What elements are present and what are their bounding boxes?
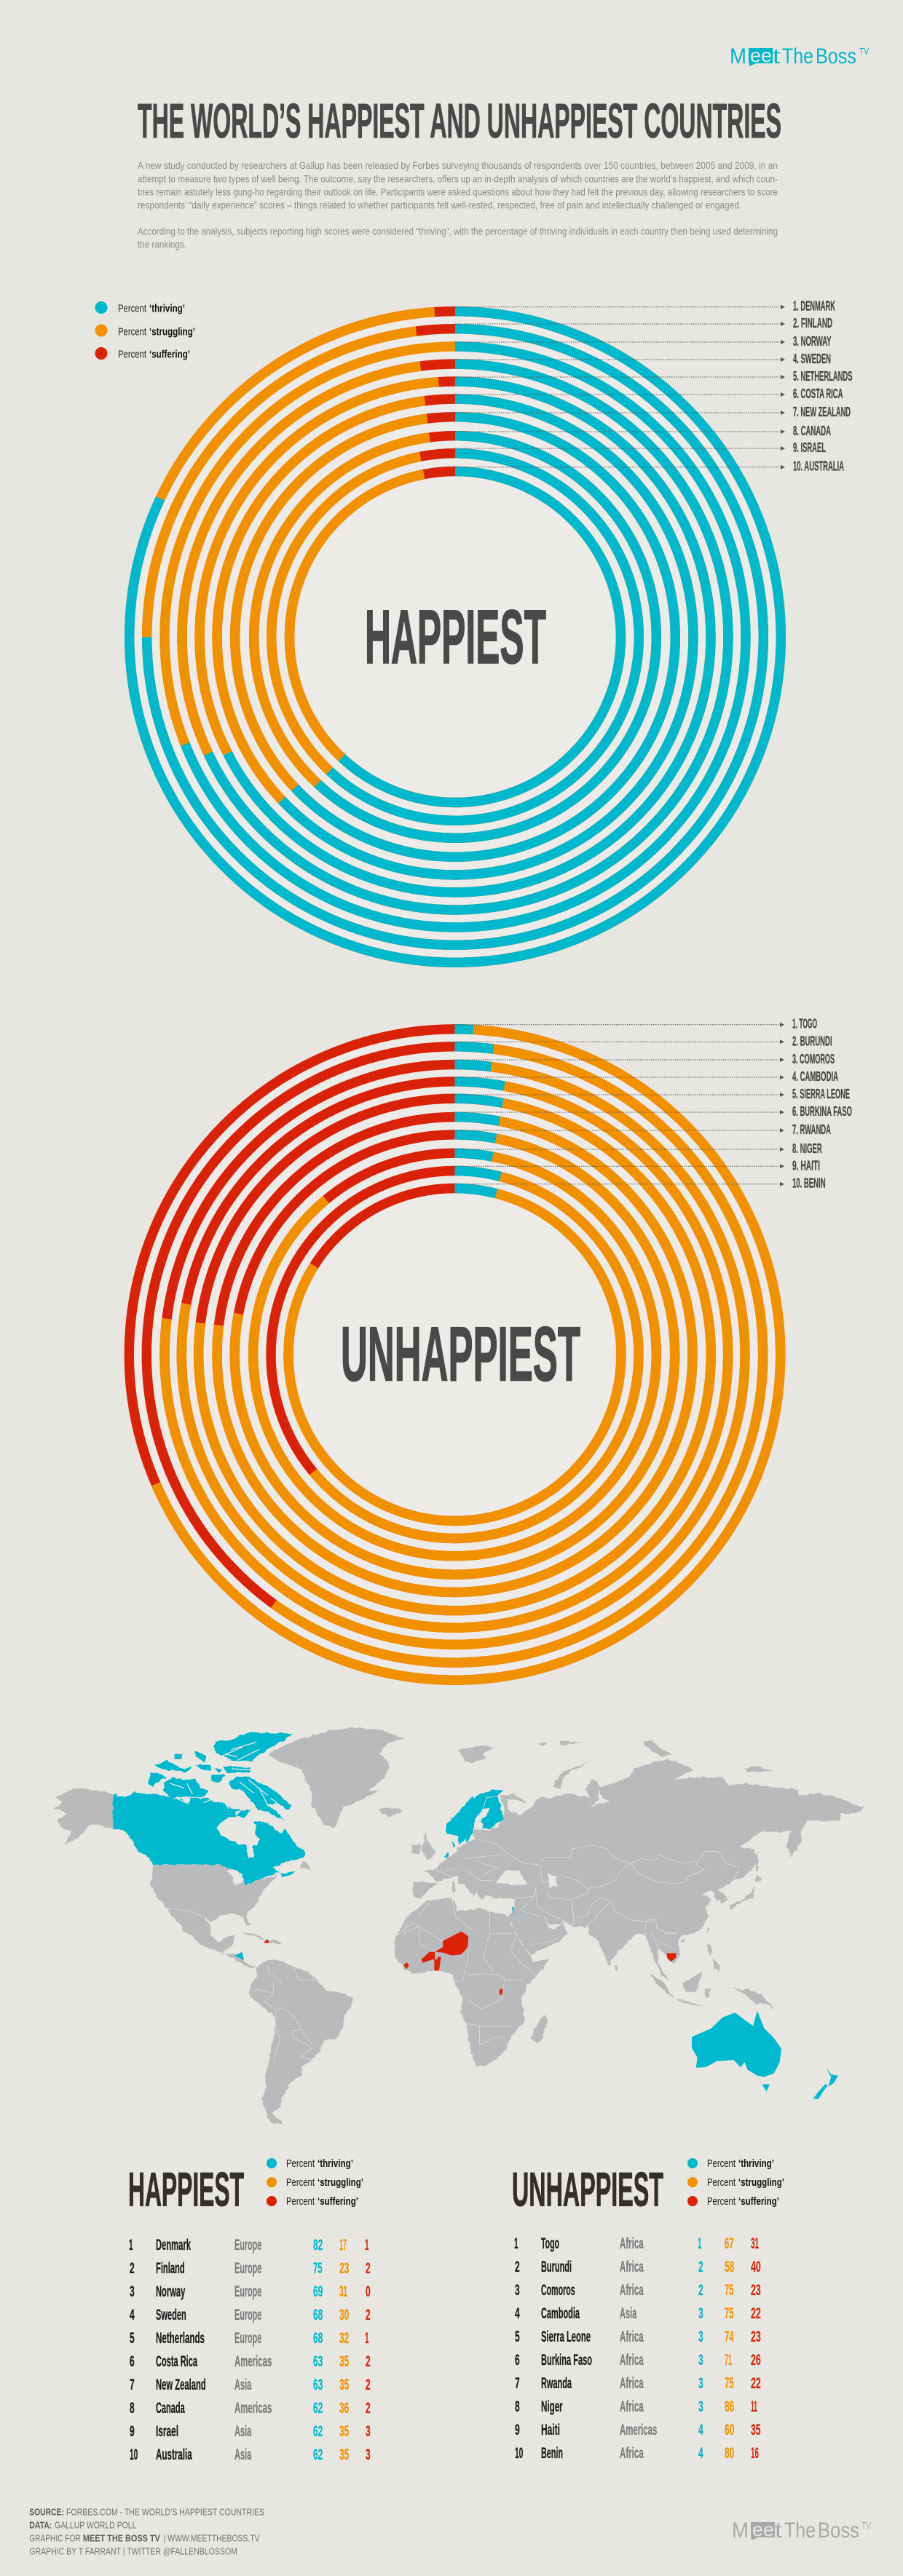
row: Canada: Canada: [156, 2400, 185, 2417]
row: Norway: 69: [313, 2283, 323, 2300]
row: Niger: 86: [725, 2398, 734, 2415]
row: Costa Rica: 35: [339, 2353, 349, 2370]
leader labels: unhappiest: 8. NIGER: [792, 1141, 822, 1156]
row: Sweden: 30: [339, 2307, 349, 2323]
footer credits: SOURCE:: [29, 2507, 64, 2517]
row: Cambodia: 4: [515, 2305, 520, 2322]
logo: Meet The Boss TV (top): Boss: [816, 44, 856, 68]
row: Finland: [130, 2260, 371, 2277]
row: Sierra Leone: [515, 2329, 761, 2345]
row: Burundi: 2: [515, 2259, 520, 2275]
row: Niger: [515, 2398, 757, 2415]
map: Canadian Arctic channels: [170, 1742, 285, 1809]
row: Israel: 35: [339, 2423, 349, 2440]
row: Burkina Faso: Africa: [620, 2352, 644, 2369]
row: Rwanda: Africa: [620, 2375, 644, 2392]
map: inland seas: [497, 1789, 611, 1929]
row: Finland: Finland: [156, 2260, 185, 2277]
ring: Comoros: [165, 1064, 745, 1645]
row: Denmark: 1: [129, 2237, 133, 2254]
ring: Finland: [147, 329, 763, 945]
row: Haiti: 9: [515, 2422, 520, 2438]
row: Costa Rica: 2: [366, 2353, 371, 2370]
ring: Canada: [254, 436, 656, 838]
row: Togo: 67: [725, 2235, 734, 2252]
legend: top: ‘suffering’: [149, 349, 190, 361]
row: Australia: 62: [313, 2446, 323, 2463]
logo: Meet The Boss TV (top): M: [730, 44, 746, 68]
map: borders Americas and Africa: [167, 1856, 535, 2062]
row: Rwanda: 3: [698, 2375, 703, 2392]
row: Burkina Faso: Burkina Faso: [541, 2352, 592, 2369]
legend: top: Percent: [118, 325, 147, 338]
logo: Meet The Boss TV (top): t: [773, 44, 781, 68]
legend: unhappiest table: ‘thriving’: [738, 2157, 774, 2170]
row: Benin: [515, 2445, 759, 2462]
row: Comoros: 2: [698, 2282, 703, 2299]
row: Denmark: Denmark: [156, 2237, 191, 2254]
row: Israel: [130, 2423, 371, 2440]
chart: unhappiest rings: UNHAPPIEST: [341, 1311, 580, 1397]
row: Comoros: Africa: [620, 2282, 644, 2299]
table: happiest: 1: [365, 2237, 369, 2254]
row: Niger: 8: [515, 2398, 520, 2415]
intro text: the rankings.: [138, 238, 186, 250]
row: Comoros: 75: [725, 2282, 734, 2299]
world map: [53, 1727, 864, 2124]
leader labels: happiest: 8. CANADA: [793, 423, 831, 438]
footer credits: DATA:: [29, 2520, 52, 2530]
row: Finland: 2: [130, 2260, 135, 2277]
table: unhappiest: 16: [751, 2445, 759, 2462]
row: Burkina Faso: 3: [698, 2352, 703, 2369]
table: unhappiest: [512, 2157, 784, 2462]
intro text: tries remain astutely less gung-ho regarding their outlook on life. Participants were asked questions about how they had felt the previous day, allowing researchers to score: [138, 186, 778, 197]
row: Netherlands: 32: [339, 2330, 349, 2347]
row: Australia: 3: [366, 2446, 371, 2463]
row: New Zealand: [130, 2377, 371, 2393]
row: Netherlands: Europe: [234, 2330, 261, 2347]
row: Togo: 1: [514, 2235, 518, 2252]
row: Rwanda: [515, 2375, 761, 2392]
row: Australia: Australia: [156, 2446, 192, 2463]
row: Cambodia: 3: [698, 2305, 703, 2322]
logo: Meet The Boss TV (bottom): Boss: [818, 2518, 859, 2543]
logo: Meet The Boss TV (bottom): t: [775, 2518, 783, 2543]
row: Australia: [130, 2446, 371, 2463]
row: Sweden: 4: [130, 2307, 135, 2323]
ring: Togo: [129, 1029, 781, 1680]
row: Costa Rica: [130, 2353, 371, 2370]
legend: top: Percent: [118, 349, 147, 361]
row: Togo: Togo: [541, 2235, 559, 2252]
row: Denmark: Europe: [234, 2237, 261, 2254]
row: Cambodia: 75: [725, 2305, 734, 2322]
leader labels: unhappiest: 1. TOGO: [792, 1016, 817, 1031]
map: Eurasia, Australia and islands: [458, 1741, 864, 2099]
footer credits: GALLUP WORLD POLL: [55, 2520, 136, 2530]
row: New Zealand: 63: [313, 2377, 323, 2393]
legend: happiest table: Percent: [286, 2195, 315, 2208]
logo: Meet The Boss TV (bottom): The: [784, 2518, 816, 2543]
intro text: According to the analysis, subjects reporting high scores were considered “thriving”, with the percentage of thriving individuals in each country then being used determining: [138, 225, 778, 237]
legend: top: Percent: [118, 303, 147, 314]
row: Israel: 9: [130, 2423, 135, 2440]
legend: happiest table: ‘struggling’: [318, 2176, 363, 2189]
row: Sweden: Sweden: [156, 2307, 186, 2323]
map: Nordic happiest countries: [466, 1789, 504, 1842]
ring: Sierra Leone: [199, 1098, 711, 1611]
row: Norway: 3: [130, 2283, 135, 2300]
row: Rwanda: 75: [725, 2375, 734, 2392]
table: happiest: [128, 2157, 371, 2463]
table: unhappiest: 31: [751, 2235, 759, 2252]
ring: Haiti: [271, 1170, 639, 1539]
row: Norway: Europe: [234, 2283, 261, 2300]
row: Sweden: 68: [313, 2307, 323, 2323]
footer credits: | WWW.MEETTHEBOSS.TV: [164, 2533, 260, 2543]
row: Haiti: [515, 2422, 761, 2438]
row: Norway: 31: [339, 2283, 347, 2300]
logo: Meet The Boss TV (top): [730, 44, 869, 68]
legend: happiest table: ‘thriving’: [318, 2157, 353, 2170]
row: Burundi: Burundi: [541, 2259, 572, 2275]
row: Netherlands: 5: [130, 2330, 135, 2347]
leader labels: happiest: 2. FINLAND: [793, 315, 832, 330]
ring: Niger: [253, 1153, 656, 1556]
row: Denmark: 82: [313, 2237, 323, 2254]
row: Rwanda: 22: [751, 2375, 761, 2392]
logo: Meet The Boss TV (top): TV: [859, 46, 869, 57]
row: Denmark: 17: [339, 2237, 347, 2254]
ring: Norway: [165, 346, 746, 927]
row: Norway: Norway: [156, 2283, 185, 2300]
row: Burkina Faso: 6: [515, 2352, 520, 2369]
row: Cambodia: Cambodia: [541, 2305, 580, 2322]
footer credits: MEET THE BOSS TV: [83, 2533, 160, 2543]
row: Costa Rica: Costa Rica: [156, 2353, 197, 2370]
row: Haiti: 60: [725, 2422, 734, 2438]
row: Benin: 4: [698, 2445, 703, 2462]
footer credits: FORBES.COM - THE WORLD’S HAPPIEST COUNTRIES: [66, 2507, 264, 2517]
row: Sierra Leone: Sierra Leone: [541, 2329, 591, 2345]
row: Niger: 3: [698, 2398, 703, 2415]
row: Canada: 2: [366, 2400, 371, 2417]
row: Cambodia: 22: [751, 2305, 761, 2322]
row: Netherlands: 68: [313, 2330, 323, 2347]
ring: Benin: [288, 1188, 621, 1521]
logo: Meet The Boss TV (top): ee: [750, 44, 772, 66]
legend: happiest table: ‘suffering’: [318, 2195, 358, 2208]
chart: unhappiest rings: [124, 1024, 785, 1685]
row: Norway: 0: [366, 2283, 371, 2300]
row: New Zealand: 2: [366, 2377, 371, 2393]
legend: happiest table: Percent: [286, 2157, 315, 2170]
ring: Cambodia: [181, 1082, 728, 1628]
row: Canada: [130, 2400, 371, 2417]
row: Costa Rica: Americas: [234, 2353, 272, 2370]
row: Costa Rica: 63: [313, 2353, 323, 2370]
leader labels: happiest: 9. ISRAEL: [793, 440, 826, 455]
row: Togo: Africa: [620, 2235, 644, 2252]
legend: unhappiest table: ‘suffering’: [738, 2195, 779, 2208]
row: Burundi: Africa: [620, 2259, 644, 2275]
row: Netherlands: Netherlands: [156, 2330, 205, 2347]
footer credits: [29, 2507, 264, 2556]
ring: Costa Rica: [217, 399, 693, 875]
leader labels: happiest: 3. NORWAY: [793, 333, 832, 349]
legend: happiest table: [267, 2157, 363, 2208]
ring: Israel: [272, 453, 639, 820]
intro text: attempt to measure two types of well being. The outcome, say the researchers, offers up an in-depth analysis of which countries are the world’s happiest, and which coun-: [138, 173, 778, 184]
row: Benin: Benin: [541, 2445, 563, 2462]
row: Finland: 75: [313, 2260, 323, 2277]
legend: happiest table: Percent: [286, 2176, 315, 2189]
legend: unhappiest table: Percent: [707, 2157, 736, 2170]
row: Finland: 2: [366, 2260, 371, 2277]
chart: happiest rings: [125, 306, 786, 967]
row: Togo: [514, 2235, 759, 2252]
leader labels: happiest: 10. AUSTRALIA: [793, 459, 844, 474]
logo: Meet The Boss TV (bottom): M: [732, 2518, 749, 2543]
row: Israel: 62: [313, 2423, 323, 2440]
row: Haiti: Haiti: [541, 2422, 560, 2438]
row: Australia: Asia: [234, 2446, 251, 2463]
row: Sierra Leone: Africa: [620, 2329, 644, 2345]
row: Cambodia: Asia: [620, 2305, 636, 2322]
row: Canada: Americas: [234, 2400, 272, 2417]
footer credits: GRAPHIC FOR: [29, 2533, 81, 2543]
row: Comoros: 3: [515, 2282, 520, 2299]
row: Niger: Africa: [620, 2398, 644, 2415]
ring: Netherlands: [200, 381, 711, 892]
map: Australia and New Zealand: [512, 1907, 838, 2099]
row: Benin: 80: [725, 2445, 734, 2462]
logo: Meet The Boss TV (bottom): [732, 2518, 871, 2543]
logo: Meet The Boss TV (bottom): ee: [752, 2518, 774, 2540]
ring: Denmark: [130, 312, 781, 962]
row: Sierra Leone: 5: [515, 2329, 520, 2345]
row: Israel: 3: [366, 2423, 371, 2440]
row: Togo: 1: [698, 2235, 702, 2252]
row: Haiti: 35: [751, 2422, 761, 2438]
table: unhappiest: UNHAPPIEST: [512, 2163, 663, 2216]
row: Comoros: [515, 2282, 761, 2299]
legend: unhappiest table: [687, 2157, 784, 2208]
row: Australia: 10: [130, 2446, 138, 2463]
row: Burkina Faso: 26: [751, 2352, 761, 2369]
table: happiest: 1: [365, 2330, 369, 2347]
map: Canada: [113, 1732, 305, 1885]
row: Comoros: 23: [751, 2282, 761, 2299]
leader labels: unhappiest: 10. BENIN: [792, 1176, 826, 1191]
row: Canada: 8: [130, 2400, 135, 2417]
row: Rwanda: Rwanda: [541, 2375, 572, 2392]
ring: New Zealand: [235, 417, 675, 857]
row: Benin: 10: [515, 2445, 523, 2462]
map: Americas and western Africa: [53, 1727, 548, 2124]
row: Benin: Africa: [620, 2445, 644, 2462]
row: Israel: Israel: [156, 2423, 178, 2440]
legend: unhappiest table: ‘struggling’: [738, 2176, 784, 2189]
footer credits: GRAPHIC BY T FARRANT | TWITTER @FALLENBLOSSOM: [29, 2546, 237, 2556]
row: Canada: 62: [313, 2400, 323, 2417]
ring: Burkina Faso: [217, 1117, 693, 1593]
row: Denmark: [129, 2237, 369, 2254]
row: New Zealand: New Zealand: [156, 2377, 206, 2393]
leader labels: happiest: 6. COSTA RICA: [793, 386, 843, 401]
row: Sierra Leone: 3: [698, 2329, 703, 2345]
map: Hudson Bay and Great Lakes: [218, 1816, 259, 1885]
row: Israel: Asia: [234, 2423, 251, 2440]
row: Norway: [130, 2283, 371, 2300]
intro text: respondents’ “daily experience” scores – things related to whether participants felt well-rested, respected, free of pain and intellectually challenged or engaged.: [138, 199, 741, 210]
row: Sierra Leone: 74: [725, 2329, 734, 2345]
row: Sweden: Europe: [234, 2307, 261, 2323]
row: Burkina Faso: [515, 2352, 761, 2369]
leader labels: unhappiest: 2. BURUNDI: [792, 1033, 832, 1048]
intro text: [138, 159, 778, 250]
map: unhappiest west Africa: [403, 1931, 468, 1970]
row: Cambodia: [515, 2305, 761, 2322]
ring: Rwanda: [234, 1135, 675, 1574]
row: Niger: Niger: [541, 2398, 563, 2415]
row: Netherlands: [130, 2330, 369, 2347]
row: New Zealand: Asia: [234, 2377, 251, 2393]
leader labels: unhappiest: 7. RWANDA: [792, 1122, 831, 1137]
row: Sweden: 2: [366, 2307, 371, 2323]
table: unhappiest: 11: [751, 2398, 757, 2415]
row: Rwanda: 7: [515, 2375, 520, 2392]
map: Nordic highlight west: [445, 1796, 473, 1858]
ring: Sweden: [182, 364, 728, 910]
row: Sweden: [130, 2307, 371, 2323]
map: Cambodia and Rwanda: [500, 1953, 677, 1995]
chart: happiest rings: HAPPIEST: [365, 595, 546, 680]
row: New Zealand: 7: [130, 2377, 135, 2393]
row: Comoros: Comoros: [541, 2282, 575, 2299]
leader labels: happiest: [455, 298, 852, 474]
row: Burundi: 2: [698, 2259, 703, 2275]
map: Haiti: [264, 1939, 269, 1943]
leader labels: happiest: 1. DENMARK: [793, 298, 835, 314]
legend: top: ‘thriving’: [149, 303, 185, 314]
logo: Meet The Boss TV (top): The: [782, 44, 813, 68]
row: Burundi: [515, 2259, 761, 2275]
leader labels: unhappiest: [454, 1016, 852, 1191]
legend: top: ‘struggling’: [149, 325, 195, 338]
row: Finland: 23: [339, 2260, 349, 2277]
row: Canada: 36: [339, 2400, 349, 2417]
legend: unhappiest table: Percent: [707, 2195, 736, 2208]
row: Haiti: Americas: [620, 2422, 657, 2438]
legend: unhappiest table: Percent: [707, 2176, 736, 2189]
leader labels: unhappiest: 3. COMOROS: [792, 1051, 835, 1066]
row: Sierra Leone: 23: [751, 2329, 761, 2345]
leader labels: happiest: 4. SWEDEN: [793, 351, 831, 366]
legend: top: [95, 301, 195, 361]
leader labels: unhappiest: 4. CAMBODIA: [792, 1069, 838, 1084]
row: Burundi: 40: [751, 2259, 761, 2275]
map: borders Eurasia: [466, 1796, 739, 1949]
ring: Australia: [290, 472, 620, 802]
map: Nicaragua: [234, 1952, 244, 1960]
row: Burkina Faso: 71: [725, 2352, 732, 2369]
row: Australia: 35: [339, 2446, 349, 2463]
row: Haiti: 4: [698, 2422, 703, 2438]
row: Finland: Europe: [234, 2260, 261, 2277]
intro text: A new study conducted by researchers at Gallup has been released by Forbes surveying thousands of respondents over 150 countries, between 2005 and 2009, in an: [138, 159, 778, 171]
row: Costa Rica: 6: [130, 2353, 135, 2370]
table: happiest: HAPPIEST: [128, 2163, 244, 2216]
row: New Zealand: 35: [339, 2377, 349, 2393]
leader labels: unhappiest: 9. HAITI: [792, 1157, 820, 1173]
row: Burundi: 58: [725, 2259, 734, 2275]
ring: Burundi: [146, 1047, 763, 1662]
logo: Meet The Boss TV (bottom): TV: [861, 2520, 871, 2531]
